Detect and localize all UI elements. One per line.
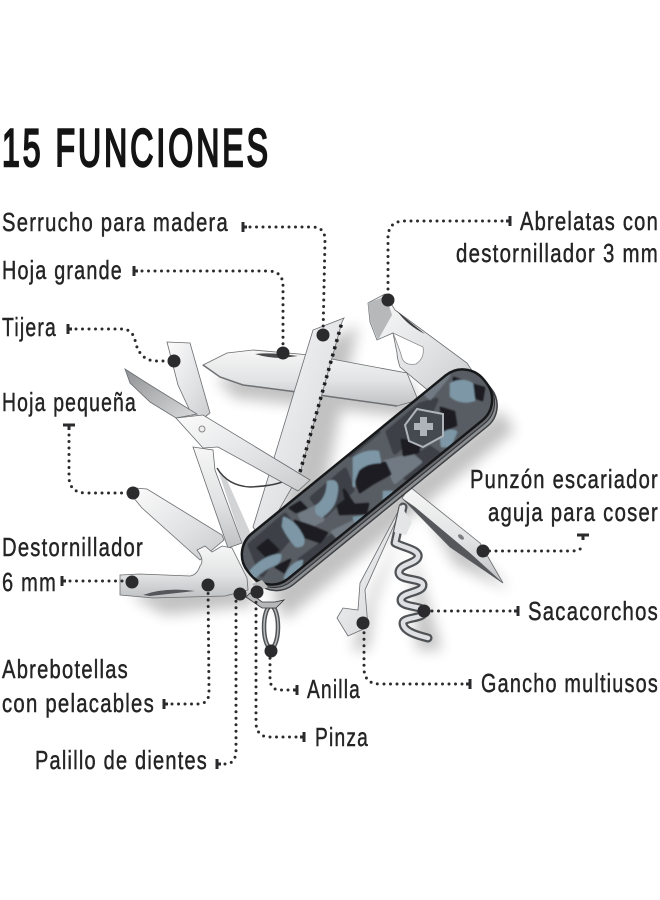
callout: Punzón escariador aguja para coser [470,464,659,558]
Victorinox shield logo [405,409,443,447]
callout: Destornillador 6 mm: Destornillador [2,532,144,562]
knife illustration [120,294,520,650]
title: 15 FUNCIONES [2,119,271,178]
callout: Palillo de dientes [35,588,246,775]
large blade [203,350,418,406]
can opener [368,294,475,392]
callout: Hoja pequeña [2,387,140,500]
callout: Abrelatas con destornillador 3 mm [382,206,659,306]
screwdriver and bottle opener tool [120,546,248,598]
callout: Destornillador 6 mm: 6 mm [2,567,57,597]
callout: Anilla: Anilla [307,674,361,704]
callout: Abrebotellas con pelacables [2,578,214,718]
handle rim [231,358,503,596]
awl [402,487,503,583]
callout: Serrucho para madera: Serrucho para madera [2,207,229,237]
multipurpose hook [337,508,400,636]
small blade [133,488,224,560]
callout: Abrebotellas con pelacables: con pelacables [2,688,155,718]
camouflage handle [243,370,491,584]
callout: Serrucho para madera [2,207,330,342]
callout: Destornillador 6 mm [2,532,144,597]
callout: Anilla [264,644,361,704]
callout: Palillo de dientes: Palillo de dientes [35,745,208,775]
corkscrew [394,505,428,638]
knife drop shadows [130,325,515,650]
callout: Hoja pequeña: Hoja pequeña [2,387,137,417]
callout: Tijera: Tijera [2,312,57,342]
metal layers of the handle [236,364,508,602]
callout: Hoja grande [2,255,290,360]
scissors [125,342,310,548]
callout: Hoja grande: Hoja grande [2,255,123,285]
callout: Gancho multiusos [356,616,659,698]
callout: Pinza: Pinza [315,722,369,752]
key ring [264,606,278,648]
callout: Abrebotellas con pelacables: Abrebotellas [2,654,129,684]
callout: Tijera [2,312,180,368]
wood saw [253,318,344,540]
metal rivet and end clip [246,580,284,608]
callout: Sacacorchos [418,596,659,626]
callout: Pinza [250,586,369,752]
